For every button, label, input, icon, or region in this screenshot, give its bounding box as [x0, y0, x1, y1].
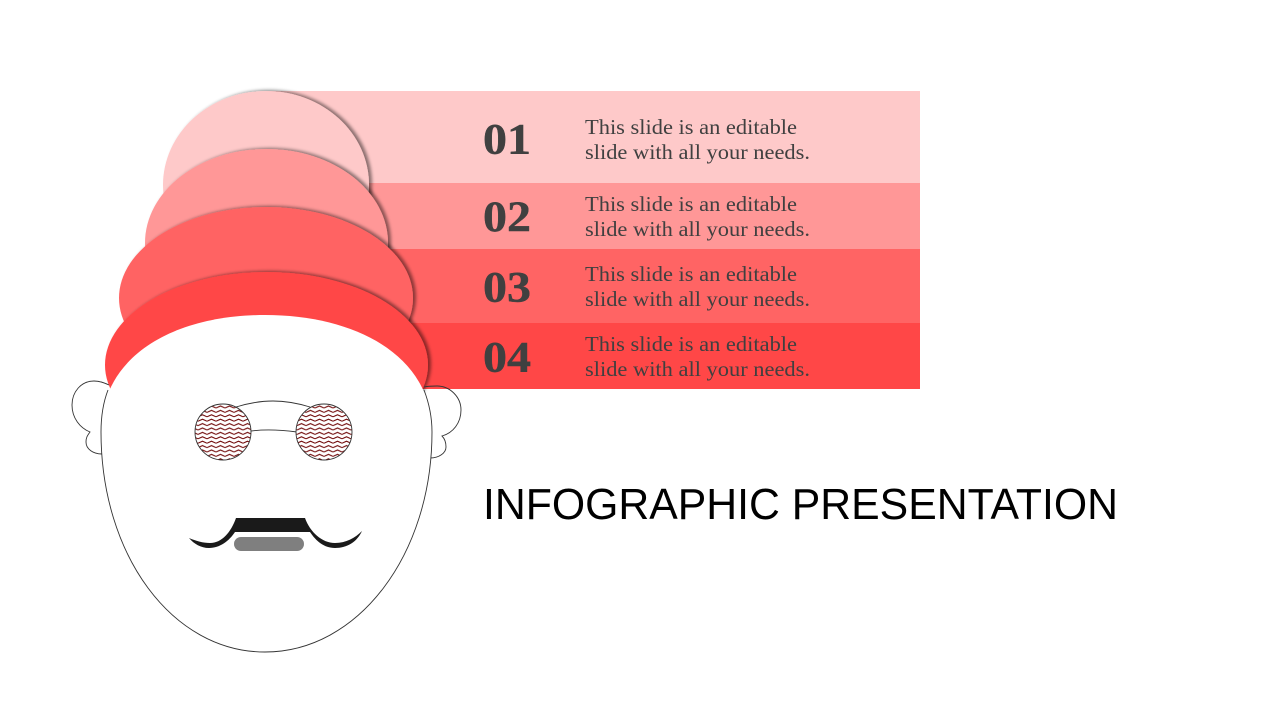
- hat: stacked red domes: [105, 91, 428, 458]
- number 04: 04: [483, 334, 531, 382]
- text block row 3: This slide is an editable: [585, 262, 797, 286]
- text block row 3: slide with all your needs.: [585, 287, 810, 311]
- icon: moustache: [189, 518, 362, 548]
- icon: glasses: [195, 401, 352, 460]
- number 02: 02: [483, 194, 531, 241]
- text block row 2: This slide is an editable: [585, 192, 797, 216]
- hat layer 1: [163, 91, 369, 279]
- face: [101, 315, 432, 652]
- panel: row 2 band: [266, 183, 920, 249]
- text block row 2: slide with all your needs.: [585, 217, 810, 241]
- number 03: 03: [483, 264, 531, 312]
- icon: mouth: [234, 537, 304, 551]
- hat layer 3: [119, 207, 413, 389]
- panel: row 4 band: [266, 323, 920, 389]
- text block row 1: This slide is an editable: [585, 115, 797, 139]
- icon: right ear: [424, 386, 461, 458]
- icon: left ear: [72, 381, 109, 454]
- text block row 4: This slide is an editable: [585, 332, 797, 356]
- text block row 4: slide with all your needs.: [585, 357, 810, 381]
- hat layer 2: [145, 149, 388, 337]
- left lens: [195, 404, 251, 460]
- right lens: [296, 404, 352, 460]
- text block row 1: slide with all your needs.: [585, 140, 810, 164]
- panel: row 1 band: [266, 91, 920, 183]
- hat layer 4: [105, 272, 428, 458]
- panel: row 3 band: [266, 249, 920, 323]
- number 01: 01: [483, 116, 531, 164]
- title: INFOGRAPHIC PRESENTATION: [483, 480, 1118, 529]
